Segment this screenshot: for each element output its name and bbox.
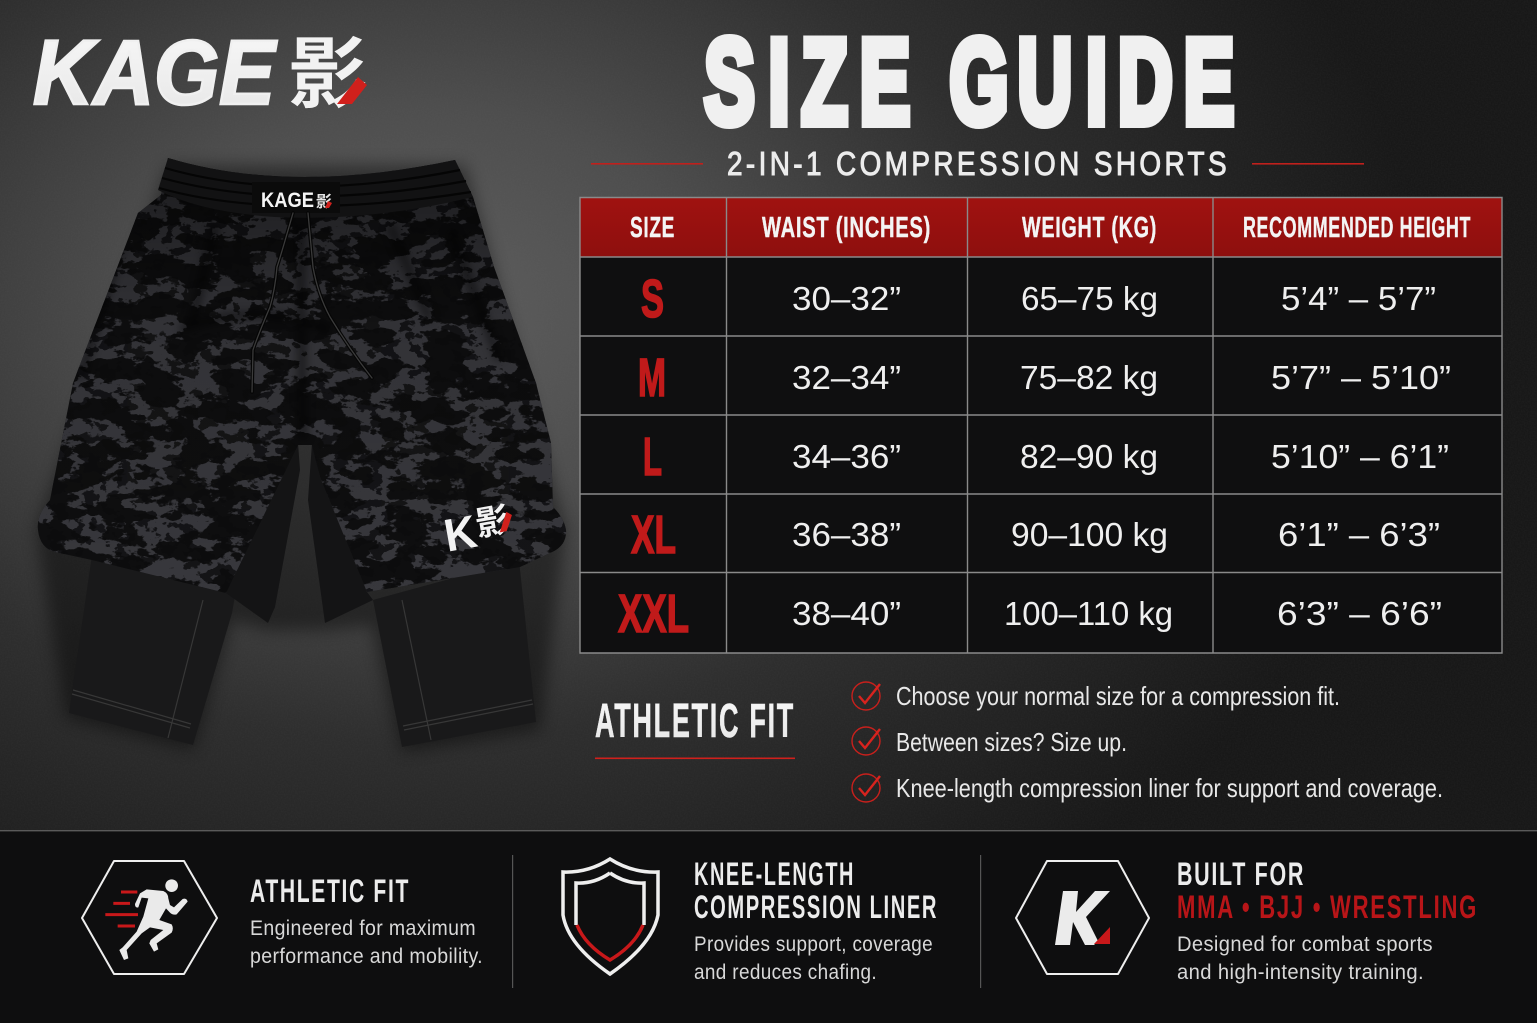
feature: built for combat sports: BUILT FOR xyxy=(1177,856,1305,892)
shorts leg logo: 影 xyxy=(471,492,513,546)
inner mesh panels xyxy=(226,443,373,623)
feature: built for combat sports: and high-intensity training. xyxy=(1177,961,1424,984)
shorts leg logo xyxy=(439,491,518,562)
table header: WEIGHT (KG) xyxy=(1022,212,1157,244)
row XL xyxy=(631,505,1440,565)
waistband xyxy=(158,158,473,218)
drawstrings xyxy=(252,213,372,392)
waistband label: KAGE xyxy=(261,189,314,212)
waistband label: 影 xyxy=(316,188,332,212)
check item 2: Between sizes? Size up. xyxy=(896,727,1127,757)
row XXL xyxy=(618,584,1442,644)
row XXL: XXL xyxy=(618,584,689,644)
table header: SIZE xyxy=(630,212,675,244)
row S: 5’4” – 5’7” xyxy=(1281,280,1436,317)
bottom feature band xyxy=(0,830,1537,1023)
logo: KAGE: KAGE xyxy=(33,22,277,124)
fit notes checklist xyxy=(852,681,1443,803)
row M: 32–34” xyxy=(792,359,901,396)
waistband label xyxy=(252,182,340,213)
icon: shield xyxy=(563,859,658,974)
logo: KAGE: 影 xyxy=(289,12,367,124)
icon: K in hexagon xyxy=(1016,861,1149,974)
row L: 34–36” xyxy=(792,438,901,475)
feature: compression liner xyxy=(563,856,938,984)
row XXL: 6’3” – 6’6” xyxy=(1277,595,1442,632)
feature: compression liner: KNEE-LENGTH xyxy=(694,856,855,892)
feature: athletic fit: performance and mobility. xyxy=(250,945,483,968)
row S: 65–75 kg xyxy=(1021,280,1158,317)
feature: built for combat sports xyxy=(1016,856,1478,984)
row L: L xyxy=(643,427,662,487)
check item 1: Choose your normal size for a compression fit. xyxy=(896,681,1340,711)
row M: 5’7” – 5’10” xyxy=(1271,359,1451,396)
size table xyxy=(580,197,1502,653)
row XL: 36–38” xyxy=(792,516,901,553)
compression liner: right leg xyxy=(373,560,536,747)
compression liner: left leg xyxy=(69,555,236,745)
row XL: XL xyxy=(631,505,676,565)
feature: compression liner: and reduces chafing. xyxy=(694,961,877,984)
check item 3: Knee-length compression liner for support and coverage. xyxy=(896,773,1443,803)
row XXL: 100–110 kg xyxy=(1004,595,1173,632)
row S xyxy=(641,269,1436,329)
shorts leg logo: K xyxy=(440,505,481,562)
feature: athletic fit: Engineered for maximum xyxy=(250,917,476,940)
camouflage outer shell xyxy=(38,158,566,592)
row L: 82–90 kg xyxy=(1020,438,1158,475)
row S: S xyxy=(641,269,664,329)
feature: athletic fit: ATHLETIC FIT xyxy=(250,873,410,909)
row M xyxy=(638,348,1451,408)
feature: compression liner: Provides support, coverage xyxy=(694,933,933,956)
athletic fit heading: ATHLETIC FIT xyxy=(595,695,795,748)
feature: compression liner: COMPRESSION LINER xyxy=(694,889,938,925)
subtitle with rules: 2-IN-1 COMPRESSION SHORTS xyxy=(727,145,1230,182)
row XXL: 38–40” xyxy=(792,595,901,632)
row S: 30–32” xyxy=(792,280,901,317)
feature: built for combat sports: Designed for combat sports xyxy=(1177,933,1433,956)
row XL: 6’1” – 6’3” xyxy=(1278,516,1440,553)
row M: 75–82 kg xyxy=(1020,359,1158,396)
product photo: 2-in-1 shorts xyxy=(30,150,575,752)
icon: runner in hexagon xyxy=(82,861,217,974)
title: SIZE GUIDE xyxy=(704,15,1234,149)
feature: athletic fit xyxy=(82,861,483,974)
row L xyxy=(643,427,1449,487)
row L: 5’10” – 6’1” xyxy=(1271,438,1449,475)
table header xyxy=(580,197,1502,257)
row M: M xyxy=(638,348,666,408)
table header: WAIST (INCHES) xyxy=(762,212,931,244)
row XL: 90–100 kg xyxy=(1011,516,1168,553)
